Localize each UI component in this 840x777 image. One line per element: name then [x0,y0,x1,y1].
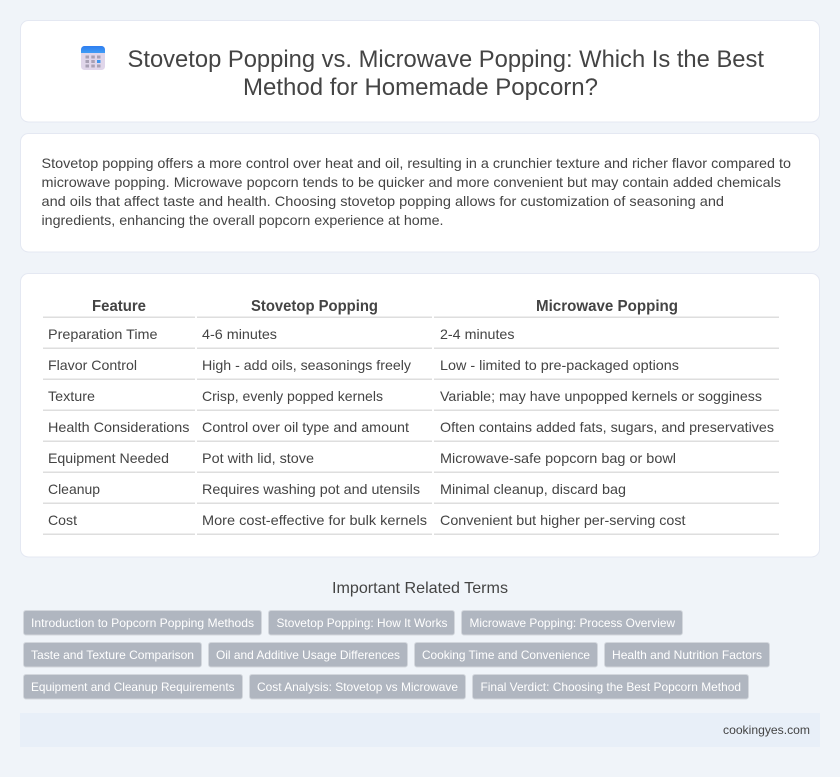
tag [208,642,408,667]
table header: Feature [92,298,146,315]
row: flavor control [48,357,679,373]
row: health considerations [48,419,774,435]
row: preparation time: 2-4 minutes [440,326,514,342]
text block: summary paragraph: and oils that affect taste and health. Choosing stovetop popping allows for customization of seasoning and [42,193,724,209]
table grid lines [43,316,779,535]
title: Stovetop Popping vs. Microwave Popping: Which Is the Best [128,46,764,73]
tag [268,610,454,635]
row: cleanup: Requires washing pot and utensils [202,481,420,497]
table header: Microwave Popping [536,298,678,315]
text block: summary paragraph: microwave popping. Microwave popcorn tends to be quicker and more convenient but may contain added chemicals [42,174,781,190]
row: cost: Convenient but higher per-serving cost [440,512,686,528]
tag: Introduction to Popcorn Popping Methods [31,616,254,630]
text block: summary paragraph [42,155,791,228]
tag: Cooking Time and Convenience [422,648,590,662]
icon: calendar [81,46,105,70]
tag [24,642,202,667]
row: cost: Cost [48,512,77,528]
row: equipment needed: Pot with lid, stove [202,450,314,466]
row: equipment needed [48,450,676,466]
footer source text: cookingyes.com [723,723,810,737]
tag [24,674,242,699]
row: preparation time [48,326,514,342]
row: flavor control: Flavor Control [48,357,137,373]
heading: important related terms: Important Related Terms [332,580,508,597]
text block: summary paragraph: Stovetop popping offers a more control over heat and oil, resulting in a crunchier texture and richer flavor compared to [42,155,791,171]
row: equipment needed: Microwave-safe popcorn bag or bowl [440,450,676,466]
row: cost [48,512,686,528]
row: preparation time: Preparation Time [48,326,158,342]
row: preparation time: 4-6 minutes [202,326,277,342]
row: texture: Variable; may have unpopped kernels or sogginess [440,388,762,404]
tag [472,674,748,699]
tag: Final Verdict: Choosing the Best Popcorn Method [480,680,741,694]
title [128,46,764,101]
row: texture: Crisp, evenly popped kernels [202,388,383,404]
row: flavor control: Low - limited to pre-packaged options [440,357,679,373]
row: texture [48,388,762,404]
panel: summary [20,134,820,252]
tag group: related terms [24,610,770,699]
tag: Cost Analysis: Stovetop vs Microwave [257,680,458,694]
table header: Stovetop Popping [251,298,378,315]
tag: Oil and Additive Usage Differences [216,648,400,662]
tag [604,642,770,667]
text block: summary paragraph: ingredients, enhancing the overall popcorn experience at home. [42,212,443,228]
tag [24,610,262,635]
row: health considerations: Often contains added fats, sugars, and preservatives [440,419,774,435]
tag: Equipment and Cleanup Requirements [31,680,234,694]
row: texture: Texture [48,388,95,404]
tag: Health and Nutrition Factors [612,648,762,662]
tag: Stovetop Popping: How It Works [276,616,448,630]
row: equipment needed: Equipment Needed [48,450,169,466]
panel: title card [20,20,820,122]
row: cost: More cost-effective for bulk kernels [202,512,427,528]
footer bar [20,713,820,747]
row: cleanup [48,481,626,497]
tag [250,674,466,699]
row: health considerations: Health Considerations [48,419,190,435]
row: flavor control: High - add oils, seasonings freely [202,357,411,373]
row: health considerations: Control over oil type and amount [202,419,409,435]
row: cleanup: Minimal cleanup, discard bag [440,481,626,497]
title: Method for Homemade Popcorn? [243,74,598,101]
row: cleanup: Cleanup [48,481,100,497]
table header [92,298,678,315]
panel: comparison table [20,274,820,557]
tag: Microwave Popping: Process Overview [470,616,675,630]
tag [414,642,598,667]
tag: Taste and Texture Comparison [31,648,194,662]
tag [462,610,682,635]
